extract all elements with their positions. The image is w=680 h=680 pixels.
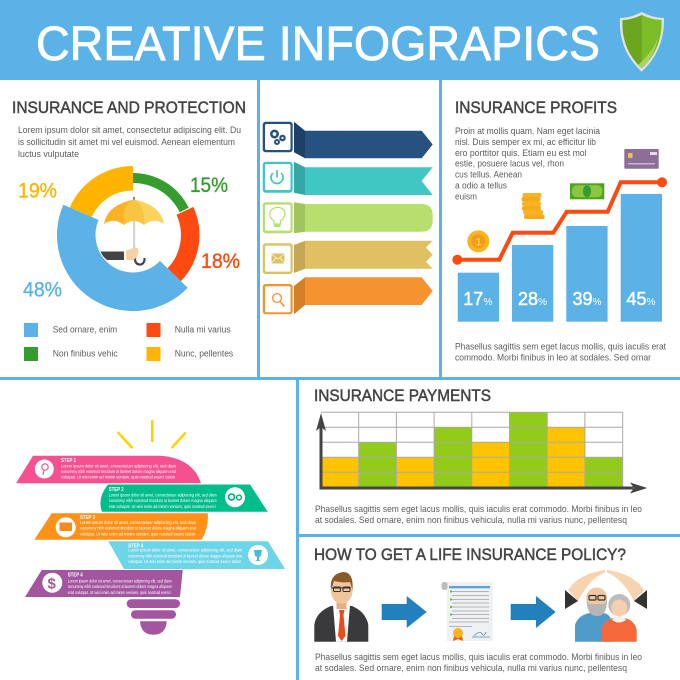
icon: coin bbox=[467, 230, 489, 252]
intro text: luctus vulputate bbox=[18, 149, 79, 160]
caption: commodo. Morbi finibus in leo at sodales. Sed ornar bbox=[455, 352, 651, 364]
icon: protected couple bbox=[565, 570, 647, 642]
bar values: 17 bbox=[463, 289, 483, 309]
intro text: is sollicitudin sit amet mi vel euismod. Aenean elementum bbox=[18, 137, 235, 148]
bar values: % bbox=[484, 297, 493, 308]
step 4 band: nonummy nibh euismod tincidunt ut laoreet dolore magna aliquam erat bbox=[128, 554, 243, 558]
bar values bbox=[463, 289, 656, 309]
intro text: Lorem ipsum dolor sit amet, consectetur adipiscing elit. Du bbox=[18, 125, 241, 136]
icon: banknote bbox=[570, 183, 604, 199]
trend line bbox=[452, 177, 667, 265]
panel: insurance profits bbox=[452, 98, 667, 364]
caption bbox=[315, 652, 642, 674]
panel: ribbon banners bbox=[263, 122, 433, 314]
panel: insurance and protection bbox=[12, 98, 246, 361]
step 3 band: volutpat. Ut wisi enim ad minim veniam, quis nostrud exerci tation bbox=[80, 532, 196, 536]
ribbon 4: mail bbox=[263, 241, 433, 274]
step 5 band bbox=[25, 570, 183, 597]
ribbon 5: search bbox=[263, 277, 433, 314]
bar values: % bbox=[592, 297, 602, 308]
step 4 band: STEP 4 bbox=[128, 544, 143, 550]
bar values: 39 bbox=[572, 289, 592, 309]
icon: coin stack bbox=[522, 193, 544, 219]
profits text: euism bbox=[455, 192, 477, 202]
bar values: % bbox=[538, 297, 547, 308]
bar chart bbox=[458, 194, 662, 322]
bulb rays bbox=[118, 421, 185, 447]
heading: INSURANCE PROFITS bbox=[455, 98, 617, 117]
intro text bbox=[18, 125, 241, 160]
legend: Nunc, pellentes bbox=[175, 348, 233, 360]
heading: HOW TO GET A LIFE INSURANCE POLICY? bbox=[314, 545, 626, 564]
percent labels: 18% bbox=[201, 250, 240, 273]
step 5 band: $ bbox=[48, 576, 56, 592]
ribbon 1: gears bbox=[263, 122, 433, 158]
profits text: a odio a tellus bbox=[455, 180, 507, 192]
arrow 1 bbox=[382, 596, 427, 628]
icon: businessman bbox=[314, 572, 368, 642]
legend bbox=[24, 323, 233, 361]
step 2 band: Lorem ipsum dolor sit amet, consectetuer adipiscing elit, sed diam bbox=[109, 492, 217, 498]
step 2 band: nonummy nibh euismod tincidunt ut laoreet dolore magna aliquam bbox=[109, 498, 217, 503]
caption: Phasellus sagittis sem eget lacus mollis, quis iaculis erat commodo. Morbi finibus in leo bbox=[315, 652, 642, 663]
profits text: nisl. Duis semper ex mi, ac efficitur lib bbox=[455, 137, 596, 148]
stacked grid chart bbox=[316, 412, 647, 494]
title: CREATIVE INFOGRAPICS bbox=[36, 18, 600, 71]
percent labels: 48% bbox=[23, 278, 62, 302]
step 5 band: nonummy nibh euismod tincidunt ut laoreet dolore magna aliquam bbox=[68, 584, 172, 589]
caption: at sodales. Sed ornare, enim non finibus vehicula, nulla mi varius nunc, pellentesq bbox=[315, 515, 627, 526]
heading: INSURANCE PAYMENTS bbox=[314, 386, 491, 405]
step 1 band: volutpat. Ut wisi enim ad minim veniam, quis nostrud exerci tation bbox=[61, 475, 176, 480]
panel: insurance payments bbox=[314, 386, 647, 526]
ribbon 3: light bulb bbox=[263, 202, 433, 233]
legend: Non finibus vehic bbox=[53, 348, 118, 360]
panel: life insurance policy bbox=[314, 545, 647, 674]
caption bbox=[315, 504, 642, 526]
step 1 band bbox=[16, 456, 201, 483]
step 1 band: Lorem ipsum dolor sit amet, consectetuer adipiscing elit, sed diam bbox=[61, 463, 176, 468]
icon: umbrella and hand bbox=[101, 197, 164, 265]
profits text: estie, posuere lacus vel, rhon bbox=[455, 158, 564, 170]
step 2 band: erat volutpat. Ut wisi enim ad minim veniam, quis nostrud exerci bbox=[109, 504, 216, 509]
legend: Nulla mi varius bbox=[175, 324, 231, 336]
icon: policy document bbox=[442, 582, 493, 641]
step 4 band: volutpat. Ut wisi enim ad minim veniam, quis nostrud exerci tation bbox=[128, 559, 242, 564]
panel: light bulb steps bbox=[16, 421, 285, 635]
axes arrows bbox=[316, 413, 647, 494]
heading: INSURANCE AND PROTECTION bbox=[12, 98, 246, 117]
step 5 band: erat volutpat. Ut wisi enim ad minim veniam, quis nostrud exerci bbox=[68, 590, 171, 595]
percent labels: 15% bbox=[190, 174, 228, 197]
bar values: 45 bbox=[626, 289, 646, 309]
profits text: Proin at mollis quam. Nam eget lacinia bbox=[455, 126, 601, 137]
profits text bbox=[455, 126, 601, 202]
profits text: ero porttitor quis. Etiam eu est mol bbox=[455, 148, 586, 159]
icon: green shield bbox=[620, 12, 664, 72]
bar values: 28 bbox=[518, 289, 538, 309]
icon: credit card bbox=[624, 149, 659, 169]
bulb base bbox=[127, 599, 180, 635]
caption bbox=[455, 342, 666, 364]
header banner bbox=[0, 0, 680, 80]
step 3 band bbox=[34, 513, 208, 540]
step 2 band bbox=[100, 484, 268, 512]
profits text: cus tellus. Aenean bbox=[455, 170, 522, 180]
step 3 band: nonummy nibh euismod tincidunt ut laoreet dolore magna aliquam erat bbox=[80, 526, 197, 530]
step 4 band bbox=[108, 541, 285, 569]
bar values: % bbox=[646, 297, 656, 308]
caption: at sodales. Sed ornare, enim non finibus vehicula, nulla mi varius nunc, pellentesq bbox=[315, 663, 627, 674]
step 5 band: Lorem ipsum dolor sit amet, consectetuer adipiscing elit, sed diam bbox=[68, 578, 172, 583]
icon: coin: 1 bbox=[476, 236, 482, 248]
step 3 band: Lorem ipsum dolor sit amet, consectetuer adipiscing elit, sed diam bbox=[80, 520, 196, 525]
step 1 band: STEP 1 bbox=[61, 458, 76, 464]
arrow 2 bbox=[511, 596, 556, 628]
caption: Phasellus sagittis sem eget lacus mollis, quis iaculis erat commodo. Morbi finibus in leo bbox=[315, 504, 642, 515]
step 3 band: STEP 3 bbox=[80, 515, 95, 521]
percent labels: 19% bbox=[18, 180, 57, 202]
percent labels bbox=[18, 174, 240, 302]
step 2 band: STEP 2 bbox=[109, 487, 124, 493]
step 5 band: STEP 4 bbox=[68, 572, 83, 578]
step 4 band: Lorem ipsum dolor sit amet, consectetuer adipiscing elit, sed diam bbox=[128, 548, 243, 552]
donut chart bbox=[57, 166, 200, 311]
legend: Sed ornare, enim bbox=[53, 324, 117, 336]
ribbon 2: power bbox=[263, 162, 433, 195]
step 1 band: nonummy nibh euismod tincidunt ut laoreet dolore magna aliquam erat bbox=[61, 469, 177, 474]
